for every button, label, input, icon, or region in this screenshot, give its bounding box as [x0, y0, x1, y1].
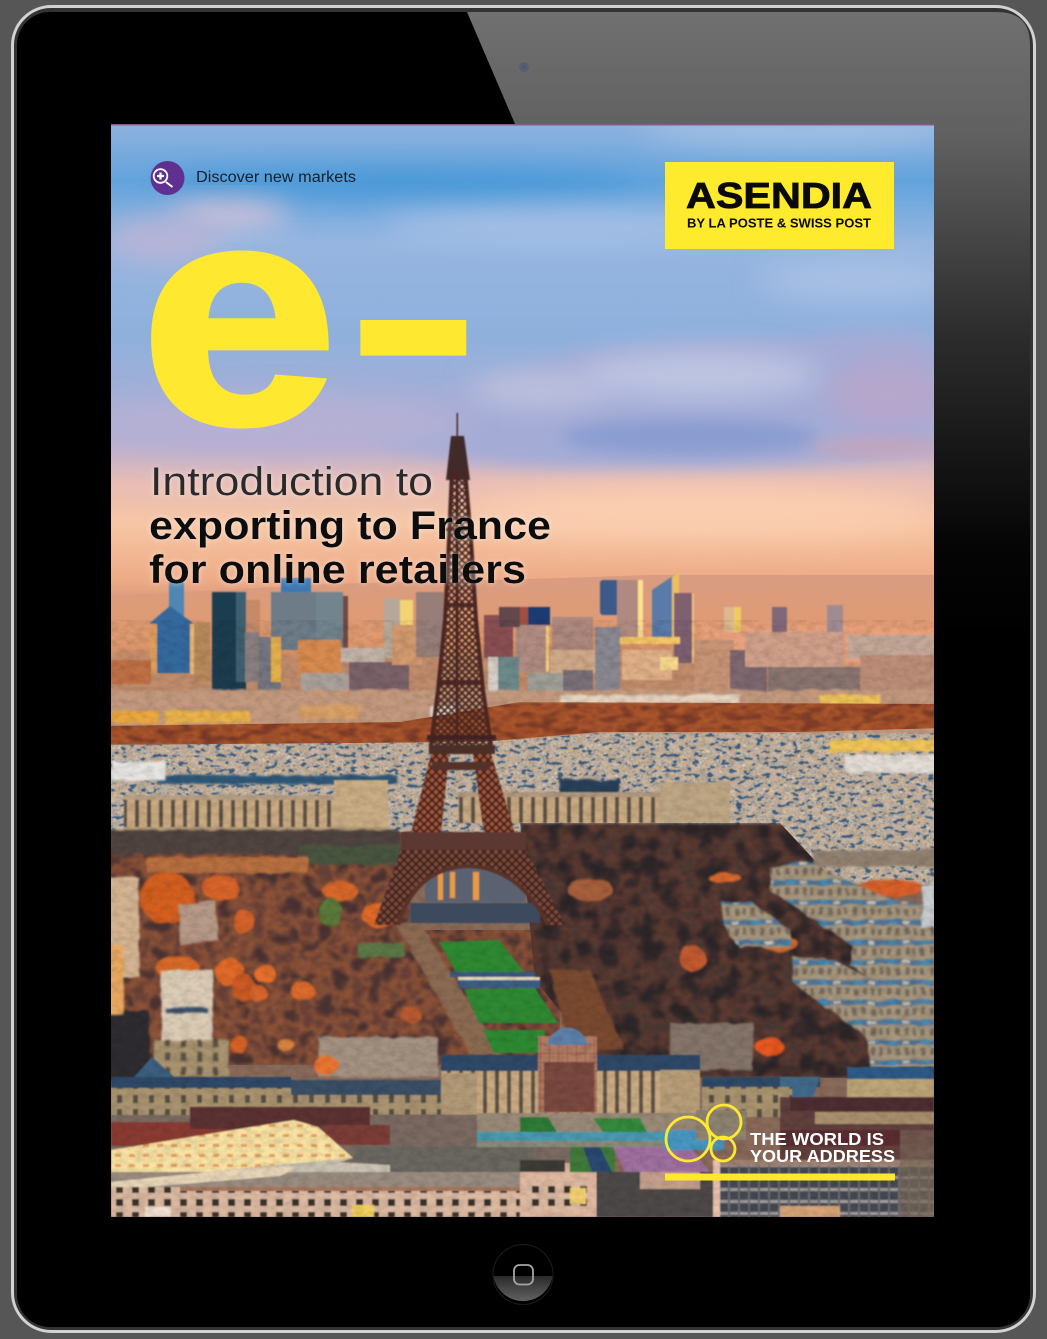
gardens below palace — [100, 823, 945, 1080]
logo: the world is your address: YOUR ADDRESS — [750, 1146, 895, 1166]
icon: home button — [493, 1244, 553, 1304]
heading — [149, 460, 551, 592]
heading: exporting to France — [149, 504, 551, 548]
tower: base and arch — [374, 850, 565, 925]
orange autumn trees — [140, 857, 922, 1075]
foreground buildings — [111, 1107, 597, 1217]
logo: the world is your address: THE WORLD IS — [750, 1129, 884, 1149]
skyline of La Defense — [111, 572, 934, 693]
panel: cover photo of Paris — [90, 114, 960, 1217]
dome with scaffolding — [538, 1028, 597, 1113]
distant horizon and haze — [111, 575, 934, 692]
dense city rooftops — [100, 733, 945, 885]
logo: Asendia: ASENDIA — [686, 175, 872, 216]
big title e- — [140, 137, 482, 490]
heading: Introduction to — [150, 460, 433, 504]
heading: for online retailers — [149, 548, 526, 592]
autumn tree band — [100, 702, 945, 745]
tower: middle legs — [401, 745, 526, 850]
photo top edge — [111, 124, 934, 126]
green lawns of Champ de Mars — [439, 940, 558, 1053]
logo: Asendia — [665, 162, 894, 249]
Eiffel Tower — [374, 413, 565, 925]
modern building, lower right — [713, 1130, 934, 1217]
forecourt of Ecole Militaire — [477, 1110, 746, 1217]
tower: spire and upper section — [427, 413, 496, 745]
logo: Asendia: BY LA POSTE & SWISS POST — [687, 216, 871, 230]
icon: camera — [519, 62, 529, 72]
icon: purple magnifier — [150, 161, 184, 195]
palais de Chaillot, right wing — [458, 782, 730, 823]
big title e-: - — [345, 151, 482, 475]
logo: the world is your address — [665, 1105, 895, 1180]
section label: Discover new markets — [196, 169, 356, 186]
palais de Chaillot, left wing — [124, 780, 388, 833]
side buildings, left — [100, 877, 229, 1077]
Ecole Militaire — [111, 1028, 934, 1160]
sky — [90, 114, 960, 604]
city texture overlay — [111, 620, 934, 1217]
big title e-: e — [140, 137, 338, 490]
sunlit rooftops band — [100, 690, 945, 745]
screen glare — [467, 12, 1030, 640]
side buildings, right — [722, 850, 945, 1068]
icon: three rings — [666, 1105, 741, 1161]
